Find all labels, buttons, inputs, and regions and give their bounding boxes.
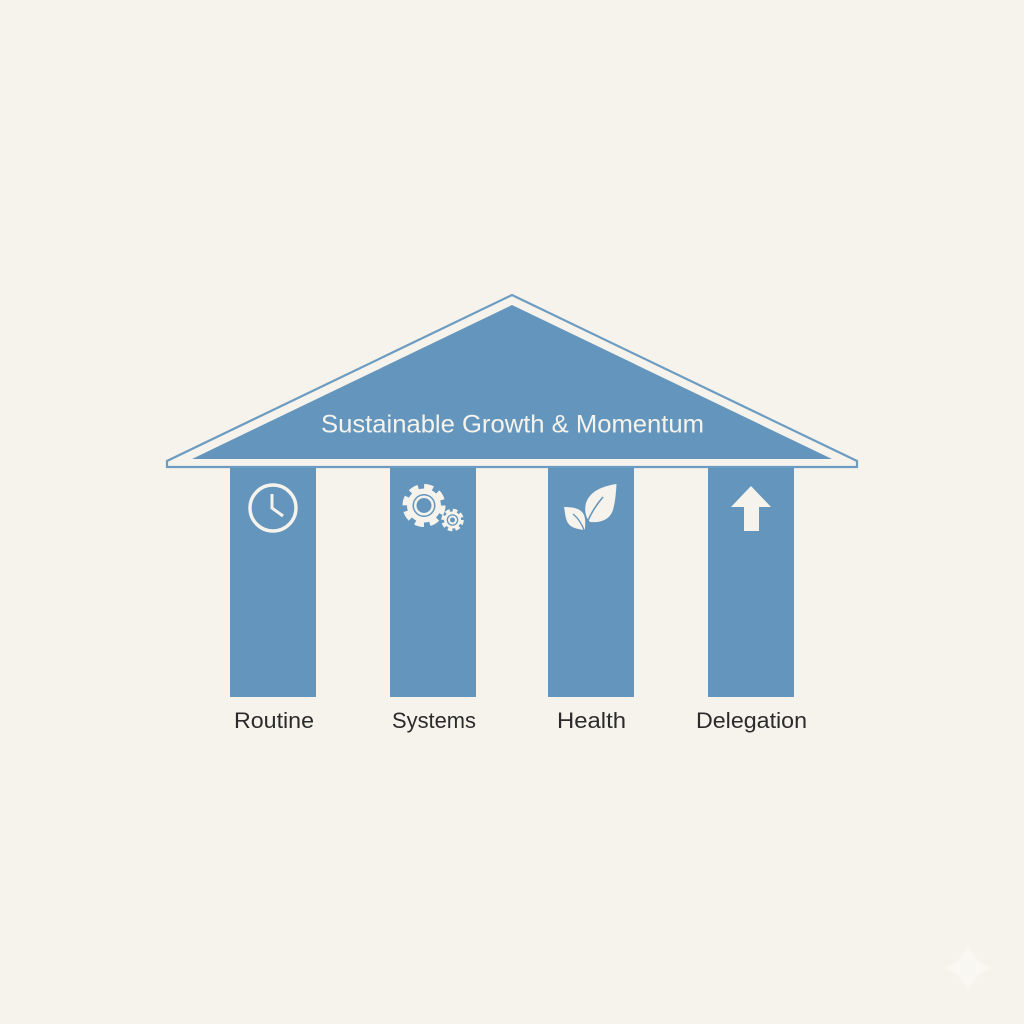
icon: gears [405, 486, 462, 530]
roof outline [167, 295, 857, 467]
pillar: delegation [696, 468, 807, 733]
icon: leaves [564, 484, 616, 532]
label: delegation: Delegation [696, 708, 807, 733]
temple diagram [167, 295, 857, 733]
roof pediment [192, 305, 832, 459]
label: routine: Routine [234, 708, 314, 733]
label: health: Health [557, 708, 626, 733]
label: systems: Systems [392, 708, 476, 733]
icon: up arrow [731, 486, 771, 531]
pillar: systems [390, 468, 476, 733]
roof title: Sustainable Growth & Momentum [321, 410, 704, 438]
icon: clock [250, 485, 296, 531]
pillar: routine [230, 468, 316, 733]
pillar: health [548, 468, 634, 733]
icon: sparkle watermark [944, 944, 992, 992]
